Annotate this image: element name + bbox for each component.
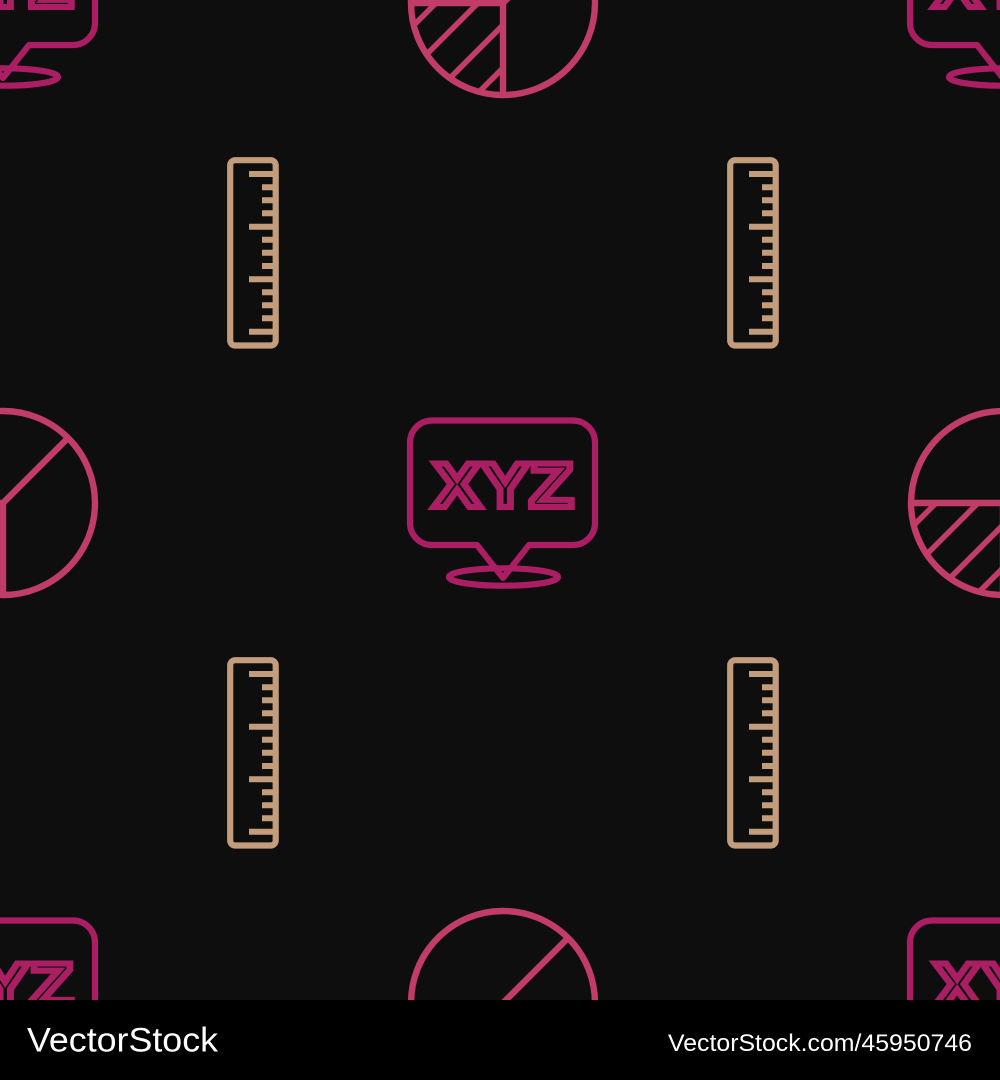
icon: XYZ speech bubble center <box>410 420 595 586</box>
icon: pie chart right <box>911 411 1000 595</box>
icon: ruler top left <box>230 160 276 346</box>
icon: XYZ speech bubble top right <box>910 0 1000 86</box>
icon: XYZ speech bubble center: XYZ <box>433 450 573 521</box>
icon: XYZ speech bubble bottom right <box>910 920 1000 1080</box>
icon: pie chart left <box>0 411 95 595</box>
icon: XYZ speech bubble bottom left <box>0 920 95 1080</box>
icon: pie chart bottom center <box>411 911 595 1080</box>
image id: VectorStock.com/45950746: VectorStock.com/45950746 <box>668 1030 972 1057</box>
icon: ruler bottom left <box>230 660 276 846</box>
icon: ruler top right <box>730 160 776 346</box>
icon: ruler bottom right <box>730 660 776 846</box>
icon: XYZ speech bubble top left <box>0 0 95 86</box>
footer bar <box>0 1000 1000 1080</box>
icon: pie chart top center <box>411 0 595 95</box>
wordmark: VectorStock: VectorStock <box>27 1022 219 1060</box>
